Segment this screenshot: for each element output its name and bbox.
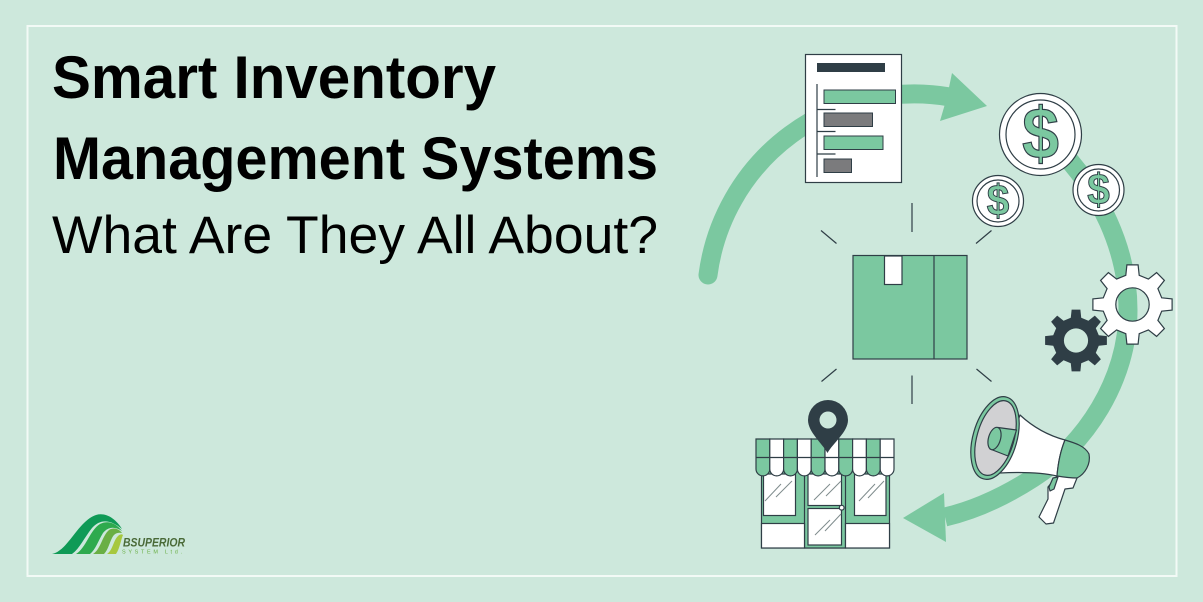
icon: large dollar coin	[1000, 92, 1082, 176]
arrow: lower arc	[903, 145, 1128, 542]
awning	[756, 439, 894, 476]
icon: cardboard box	[853, 256, 967, 359]
icon: report document	[806, 54, 902, 182]
title: Smart Inventory	[52, 44, 497, 111]
title	[52, 44, 658, 192]
icon: white gear	[1093, 265, 1172, 344]
icon: dark gear	[1045, 310, 1107, 371]
icon: large dollar coin: $	[1022, 92, 1059, 174]
icon: megaphone	[962, 391, 1089, 524]
icon: right dollar coin	[1073, 164, 1124, 216]
icon: right dollar coin: $	[1087, 165, 1110, 214]
arrow: upper arc	[708, 73, 987, 275]
icon: location pin	[808, 400, 848, 453]
icon: left dollar coin	[972, 176, 1024, 226]
rays around box	[821, 203, 992, 404]
logo: BSuperior System: BSUPERIOR	[123, 536, 185, 550]
logo: BSuperior System	[52, 514, 185, 556]
store body	[762, 470, 890, 548]
title: Management Systems	[53, 125, 658, 192]
subtitle: What Are They All About?	[52, 206, 658, 265]
icon: left dollar coin: $	[987, 176, 1009, 225]
logo: BSuperior System: SYSTEM Ltd.	[122, 550, 182, 556]
icon: storefront	[756, 439, 894, 548]
